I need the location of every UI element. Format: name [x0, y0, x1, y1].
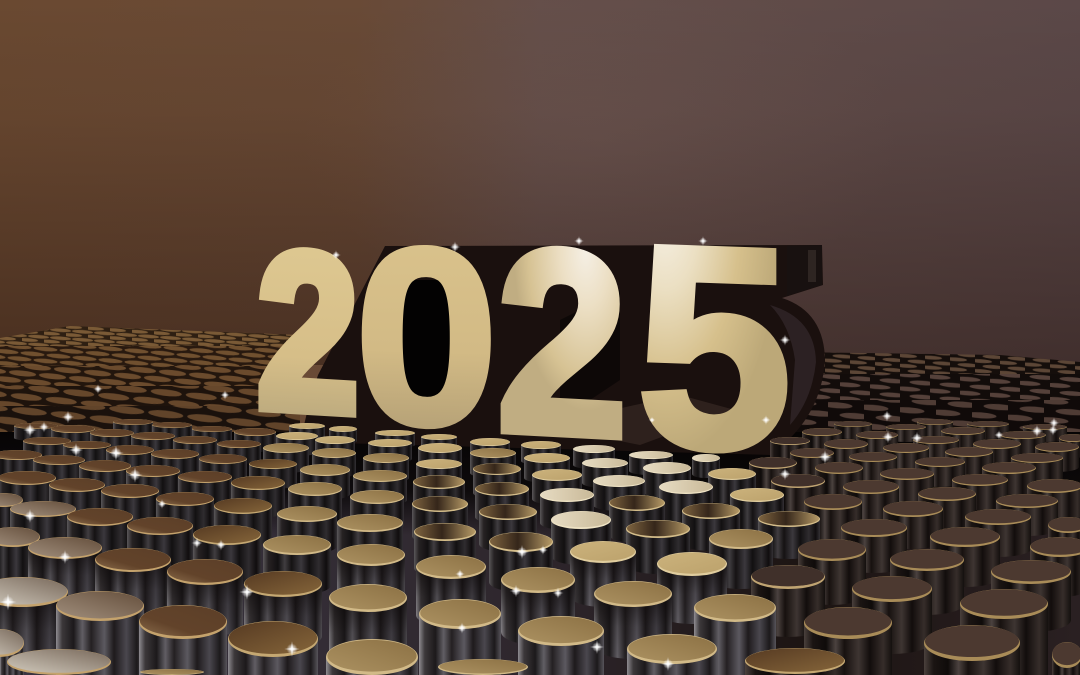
digit: first 2: 2 — [257, 205, 359, 460]
cylinder field: far left — [0, 320, 300, 432]
cylinder field: far right — [790, 350, 1080, 432]
dark reflective extrusion behind the digits — [300, 245, 825, 455]
digit: 5: 5 — [637, 185, 791, 510]
digit: second 2: 2 — [497, 195, 627, 491]
sparkles: specular highlights — [0, 236, 1060, 671]
cylinder field: rows of metal cylinders from back to front — [0, 419, 1080, 675]
floor beneath the cylinders — [0, 425, 1080, 675]
title: gold 2025 digits — [257, 185, 791, 510]
digit: 0: 0 — [354, 194, 499, 480]
